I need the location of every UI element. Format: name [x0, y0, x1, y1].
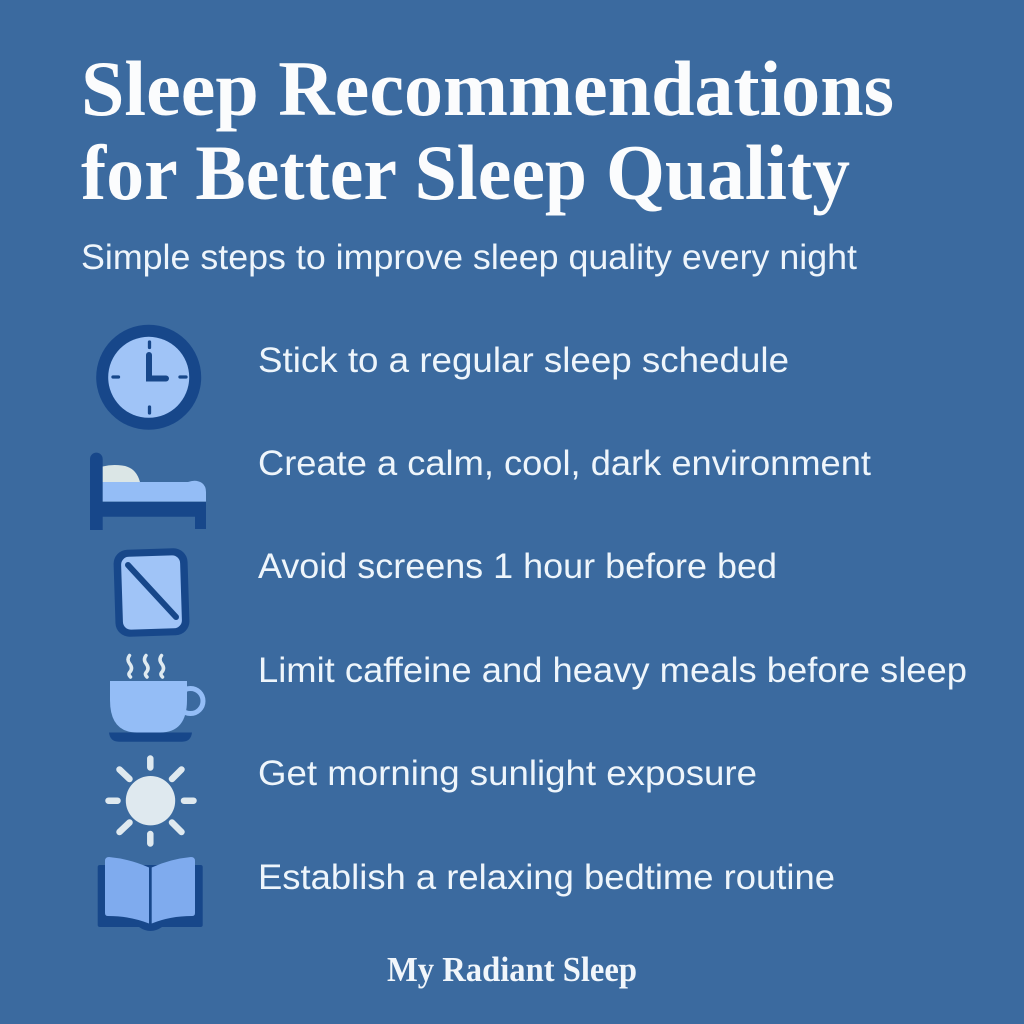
icon: screen off	[113, 548, 190, 637]
brand footer: My Radiant Sleep	[387, 950, 637, 989]
icon: coffee cup	[109, 656, 203, 742]
item text: screens: Avoid screens 1 hour before bed	[258, 547, 777, 586]
item text: schedule: Stick to a regular sleep schedule	[258, 341, 789, 380]
item text: caffeine: Limit caffeine and heavy meals before sleep	[258, 651, 967, 690]
item text: sunlight: Get morning sunlight exposure	[258, 754, 757, 793]
icon: open book	[98, 857, 203, 931]
title: Sleep Recommendations	[81, 45, 894, 132]
subtitle: Simple steps to improve sleep quality every night	[81, 238, 857, 277]
title: for Better Sleep Quality	[81, 129, 850, 216]
item text: environment: Create a calm, cool, dark environment	[258, 444, 871, 483]
icon: sun	[108, 758, 194, 844]
title	[81, 45, 894, 216]
icon: clock	[96, 325, 201, 430]
icon: bed	[90, 453, 206, 530]
item text: routine: Establish a relaxing bedtime routine	[258, 858, 835, 897]
